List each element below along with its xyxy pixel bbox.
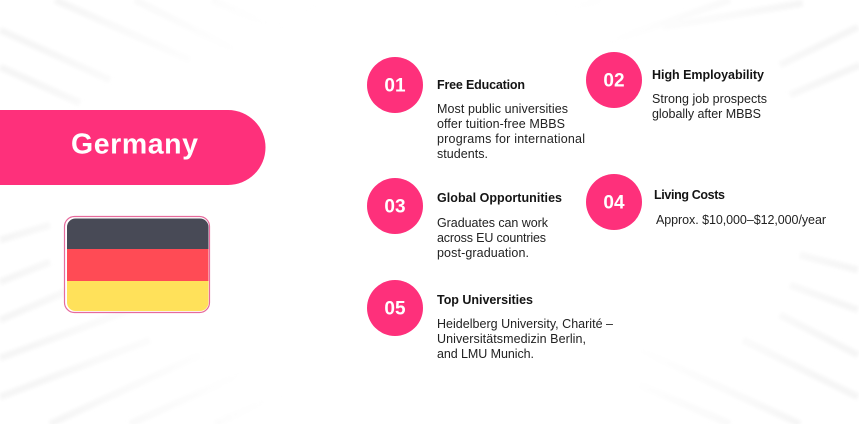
icon: German flag	[64, 216, 210, 312]
heading: High Employability: High Employability	[652, 68, 764, 82]
body: High Employability: Strong job prospects	[652, 92, 767, 106]
badge 05: 05	[384, 298, 406, 320]
title banner: Germany	[0, 110, 266, 185]
item 01: Free Education	[367, 57, 585, 161]
body: Global Opportunities: across EU countries	[437, 231, 546, 245]
body: High Employability	[652, 92, 767, 121]
title banner: Germany: Germany	[71, 128, 198, 160]
body: Living Costs: Approx. $10,000–$12,000/year	[656, 213, 826, 227]
item 02: High Employability	[586, 52, 767, 121]
body: Free Education: programs for international	[437, 132, 585, 146]
heading: Free Education: Free Education	[437, 78, 525, 92]
item 04: Living Costs	[586, 174, 826, 230]
body: Global Opportunities: post-graduation.	[437, 246, 529, 260]
body: High Employability: globally after MBBS	[652, 107, 761, 121]
item 03: Global Opportunities	[367, 178, 562, 260]
badge 02	[586, 52, 642, 108]
badge 04	[586, 174, 642, 230]
body: Top Universities: and LMU Munich.	[437, 347, 534, 361]
heading: Global Opportunities: Global Opportunities	[437, 191, 562, 205]
body: Free Education: Most public universities	[437, 102, 568, 116]
badge 05	[367, 280, 423, 336]
body: Global Opportunities: Graduates can work	[437, 216, 549, 230]
badge 03: 03	[384, 196, 406, 218]
body: Top Universities	[437, 317, 613, 361]
body: Top Universities: Heidelberg University, Charité –	[437, 317, 613, 331]
body: Free Education: offer tuition-free MBBS	[437, 117, 565, 131]
badge 03	[367, 178, 423, 234]
body: Top Universities: Universitätsmedizin Berlin,	[437, 332, 586, 346]
body: Free Education	[437, 102, 585, 161]
heading: Living Costs: Living Costs	[654, 188, 725, 202]
heading: Top Universities: Top Universities	[437, 293, 533, 307]
body: Free Education: students.	[437, 147, 488, 161]
badge 01	[367, 57, 423, 113]
badge 02: 02	[603, 70, 625, 92]
badge 04: 04	[603, 192, 625, 214]
body: Global Opportunities	[437, 216, 549, 260]
item 05: Top Universities	[367, 280, 613, 361]
badge 01: 01	[384, 76, 406, 96]
